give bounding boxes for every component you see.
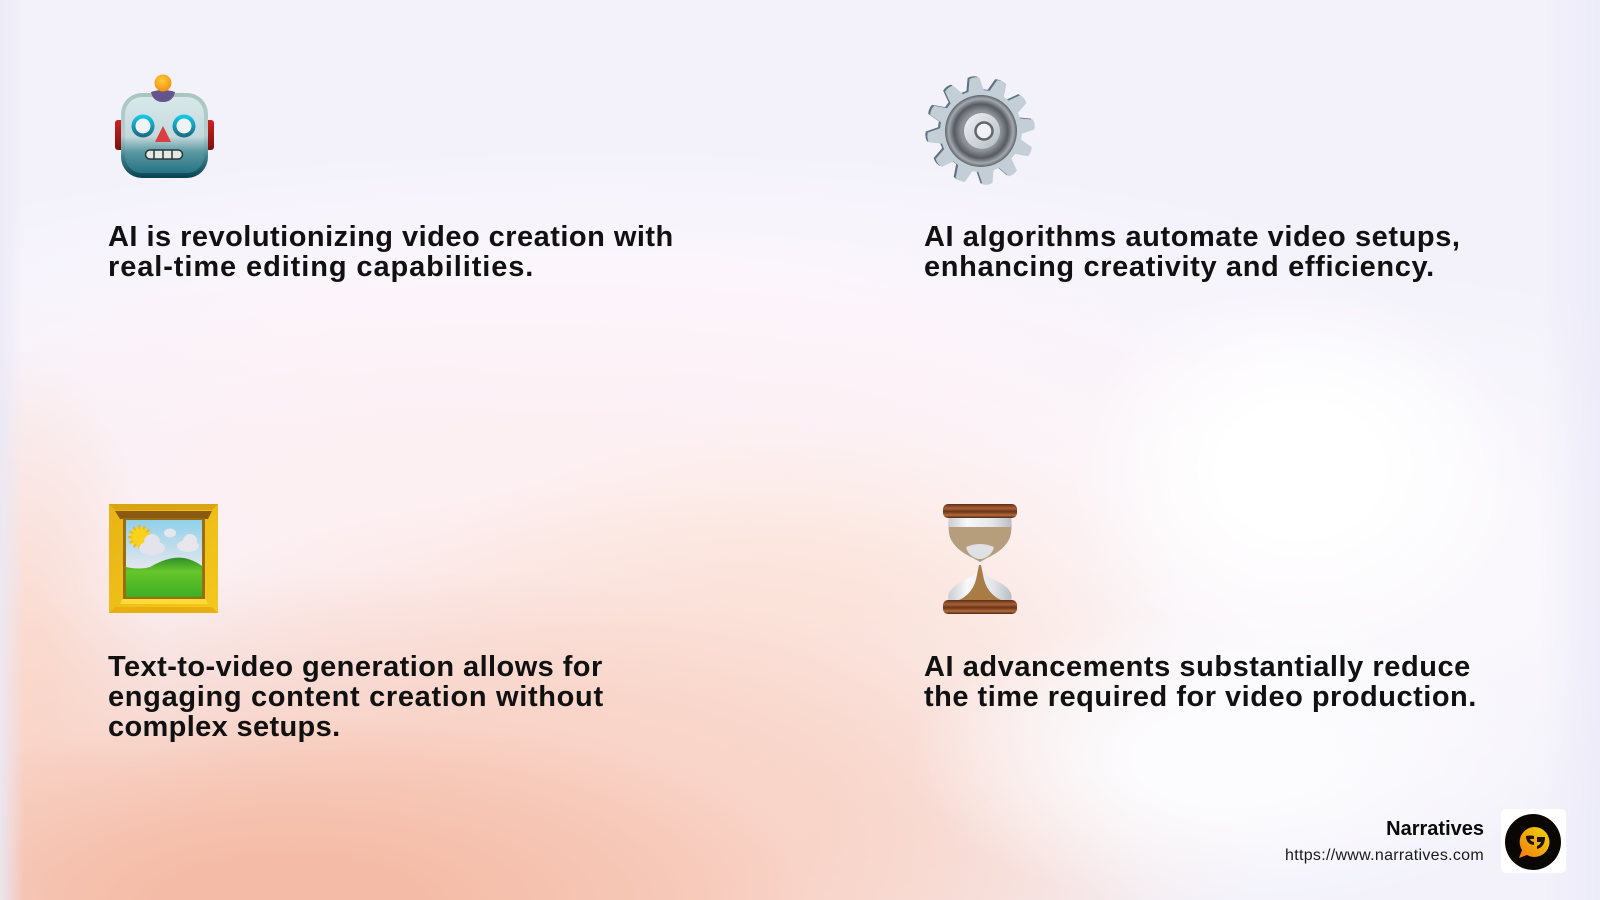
brand name: Narratives: [1386, 818, 1484, 840]
text block: real-time editing: [108, 221, 674, 283]
text block: automate setups: enhancing creativity and efficiency.: [924, 251, 1435, 283]
text block: text-to-video: Text-to-video generation allows for: [108, 651, 603, 683]
text block: text-to-video: [108, 651, 604, 743]
text block: real-time editing: AI is revolutionizing video creation with: [108, 221, 674, 253]
text block: reduced time: [924, 651, 1477, 713]
text block: text-to-video: engaging content creation without: [108, 681, 604, 713]
text block: text-to-video: complex setups.: [108, 711, 340, 743]
logo: [1501, 809, 1566, 873]
text block: reduced time: the time required for video production.: [924, 681, 1477, 713]
text block: automate setups: [924, 221, 1461, 283]
text block: real-time editing: real-time editing capabilities.: [108, 251, 534, 283]
text block: automate setups: AI algorithms automate video setups,: [924, 221, 1461, 253]
text block: reduced time: AI advancements substantially reduce: [924, 651, 1471, 683]
brand url: https://www.narratives.com: [1285, 847, 1484, 864]
